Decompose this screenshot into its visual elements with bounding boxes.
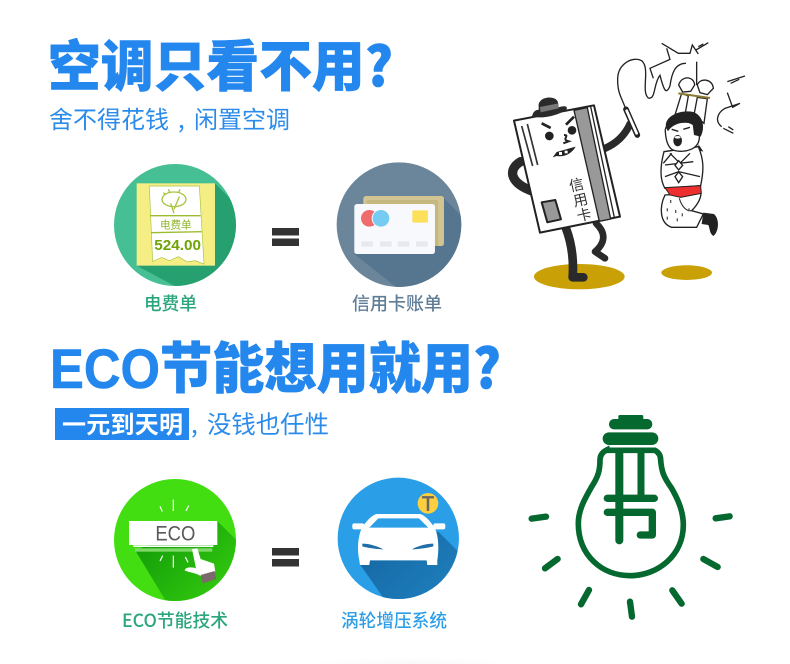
icon: electricity bill circle: 电费单 [160,218,192,233]
title: 空调只看不用: 空调只看不用? [48,22,393,102]
subtitle: 舍不得花钱: 闲置空调 [194,100,290,135]
title: ECO节能想用就用: ECO [50,337,160,400]
icon: turbo car circle: T [422,494,434,516]
subtitle: 没钱也任性: 没钱也任性 [207,406,329,441]
subtitle: 没钱也任性: , [191,406,198,441]
icon: electricity bill circle [114,164,236,286]
subtitle: 舍不得花钱: 舍不得花钱 [49,100,169,135]
icon: turbo car circle [338,478,459,599]
subtitle: 舍不得花钱: , [178,100,185,135]
equals sign [272,548,299,566]
label: 涡轮增压系统: 涡轮增压系统 [341,607,447,633]
icon: ECO air conditioner circle [114,479,236,601]
illustration: credit card whipping a man: 信 [567,173,586,197]
icon: ECO air conditioner circle: ECO [155,521,195,545]
equals sign [272,228,299,246]
icon: credit card circle [336,162,462,287]
title: ECO节能想用就用: 节能想用就用? [160,324,501,404]
icon: light bulb with 节 character [532,415,730,617]
badge: 一元到天明: 一元到天明 [62,405,183,440]
illustration: credit card whipping a man: 卡 [575,203,594,227]
label: ECO节能技术: ECO节能技术 [122,607,228,633]
icon: electricity bill circle: 524.00 [154,238,201,254]
illustration: credit card whipping a man [513,43,745,289]
label: 电费单: 电费单 [144,290,197,316]
label: 信用卡账单: 信用卡账单 [352,290,442,316]
illustration: credit card whipping a man: 用 [571,188,590,212]
